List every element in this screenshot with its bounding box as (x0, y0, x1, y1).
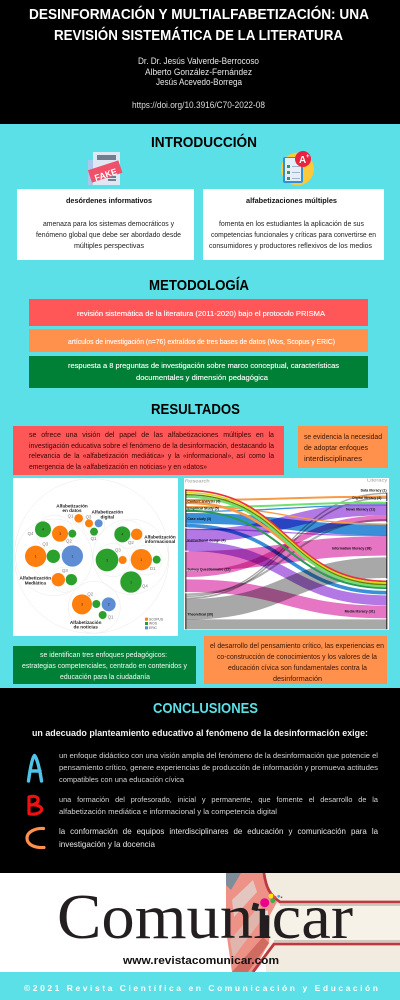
result: pensamiento crítico: el desarrollo del pensamiento crítico, las experiencias en (210, 641, 384, 650)
result: enfoques pedagógicos (13, 646, 196, 684)
conclusion A: pensamiento crítico, genere experiencias de producción de información y promueva actitudes (59, 763, 378, 772)
result: enfoques pedagógicos: estrategias competenciales, centrado en contenidos y (22, 661, 187, 670)
chart: bubble chart of literacies: Q2 (128, 540, 134, 545)
chart: bubble chart of literacies: Q3 (62, 568, 68, 573)
result: enfoques pedagógicos: educación para la ciudadanía (60, 672, 151, 681)
chart: bubble chart of literacies: Q3 (115, 547, 121, 552)
chart: sankey research to literacy: Research (185, 478, 210, 483)
chart: bubble chart of literacies: Alfabetización (70, 620, 102, 625)
panel: conclusiones (0, 688, 400, 873)
result: alfabetizaciones múltiples: se ofrece una visión del papel de las alfabetizaciones múltiples en la (29, 430, 275, 439)
chart: sankey research to literacy: Content analysis (6) (187, 499, 220, 503)
panel: desórdenes informativos: desórdenes informativos (66, 196, 152, 205)
logo: Comunicar: Comunıcar (57, 881, 353, 952)
conclusion C (59, 826, 378, 849)
chart: sankey research to literacy: News literacy (11) (346, 507, 375, 511)
icon: fake news: FAKE (93, 166, 118, 183)
result: pensamiento crítico: desinformación (273, 674, 322, 683)
icon: letter A (28, 756, 42, 781)
chart: bubble chart of literacies: 2 (108, 603, 110, 607)
chart: bubble chart of literacies: 3 (81, 603, 83, 607)
legend (145, 617, 164, 630)
icon: A plus notebook (281, 151, 314, 186)
chart: bubble chart of literacies: 4 (42, 528, 44, 532)
chart: sankey research to literacy: Data literacy (1) (361, 489, 387, 493)
chart: bubble chart of literacies: D1 (150, 566, 156, 571)
title: DESINFORMACIÓN Y MULTIALFABETIZACIÓN: UNA (29, 5, 369, 23)
icon: fake news (88, 152, 122, 185)
footer copyright bar (0, 972, 400, 1000)
chart: bubble chart of literacies: Q4 (142, 584, 148, 589)
conclusion A: compatibles con una educación cívica (59, 775, 185, 784)
legend: WOS (149, 622, 158, 626)
heading: introducción: INTRODUCCIÓN (151, 133, 257, 151)
legend: ERIC (149, 626, 158, 630)
panel: desórdenes informativos: múltiples perspectivas (74, 241, 144, 250)
result: pensamiento crítico: co-construcción de conocimientos y los valores de la (217, 652, 378, 661)
method step: preguntas (29, 356, 368, 388)
method step: artículos: artículos de investigación (n=76) extraídos de tres bases de datos (Wos, Scopus y ERIC) (68, 337, 335, 346)
result: pensamiento crítico: educación cívica son fundamentales contra la (228, 663, 368, 672)
chart: bubble chart of literacies: Alfabetización (92, 510, 123, 515)
header panel (0, 0, 400, 124)
method step: revisión: revisión sistemática de la literatura (2011-2020) bajo el protocolo PRISMA (77, 309, 326, 318)
chart: bubble chart of literacies: informacional (145, 539, 175, 544)
panel: alfabetizaciones múltiples: competencias funcionales y críticas para convertirse en (211, 230, 376, 239)
logo dots (251, 894, 282, 938)
books photo (226, 873, 400, 972)
chart: bubble chart of literacies: Q1 (91, 536, 97, 541)
panel: alfabetizaciones múltiples (203, 189, 384, 260)
result: enfoques interdisciplinares: interdisciplinares (304, 454, 362, 463)
chart: bubble chart of literacies: 3 (59, 532, 61, 536)
conclusion B (59, 795, 379, 816)
icon: A plus notebook: + (306, 154, 310, 160)
method step: preguntas: respuesta a 8 preguntas de investigación sobre marco conceptual, características (68, 361, 339, 370)
panel: alfabetizaciones múltiples: fomenta en los estudiantes la aplicación de sus (219, 219, 364, 228)
chart: sankey research to literacy: Empirical Study (5) (187, 506, 219, 510)
panel: alfabetizaciones múltiples: alfabetizaciones múltiples (246, 196, 337, 205)
chart: bubble chart of literacies: digital (100, 514, 114, 519)
chart: bubble chart of literacies: Alfabetización (56, 504, 88, 509)
chart: sankey research to literacy: Digital literacy (4) (352, 496, 381, 500)
authors (138, 56, 259, 87)
chart: bubble chart of literacies: Mediática (25, 580, 46, 585)
chart: bubble chart of literacies: 1 (35, 555, 37, 559)
heading: resultados: RESULTADOS (151, 401, 240, 418)
result: enfoques pedagógicos: se identifican tres enfoques pedagógicos: (40, 650, 167, 659)
chart: bubble chart of literacies: Q1 (108, 615, 114, 620)
chart: bubble chart of literacies: 1 (140, 558, 142, 562)
chart: sankey research to literacy: Theoretical (30) (187, 612, 213, 616)
icon: letter B (29, 796, 42, 814)
chart: sankey research to literacy: Literacy (367, 478, 388, 483)
conclusion B: una formación del profesorado, inicial y permanente, que fomente el desarrollo de la (59, 795, 379, 804)
chart: bubble chart of literacies: Q2 (66, 539, 72, 544)
chart: bubble chart of literacies: 1 (71, 554, 73, 558)
result: alfabetizaciones múltiples: emergencia de la «alfabetización en noticias» y en «datos» (29, 462, 207, 471)
chart: bubble chart of literacies: 4 (121, 533, 123, 537)
chart: sankey research to literacy: Instructional design (4) (187, 539, 226, 543)
title (29, 5, 369, 44)
chart: bubble chart of literacies: Q3 (42, 541, 49, 546)
heading: conclusiones: CONCLUSIONES (153, 700, 258, 717)
conclusion C: investigación y la docencia (59, 839, 155, 849)
title: REVISIÓN SISTEMÁTICA DE LA LITERATURA (54, 26, 343, 44)
authors: Jesús Acevedo-Borrega (156, 77, 242, 87)
chart: sankey research to literacy: Case study (3) (187, 517, 211, 521)
chart: bubble chart of literacies: Q3 (86, 515, 92, 520)
result: alfabetizaciones múltiples (13, 426, 284, 475)
icon: A plus notebook: A (299, 155, 306, 166)
chart: bubble chart of literacies: de noticias (74, 625, 98, 630)
panel: desórdenes informativos (17, 189, 194, 260)
method step: preguntas: documentales y dimensión pedagógica (136, 373, 269, 382)
chart: bubble chart of literacies: 3 (106, 558, 108, 562)
result: alfabetizaciones múltiples: investigación educativa sobre el fenómeno de la desinformación, destacando la (29, 441, 275, 450)
chart: bubble chart of literacies: en datos (62, 508, 82, 513)
conclusion B: alfabetización mediática e informacional y la competencia digital (59, 807, 277, 816)
conclusion C: la conformación de equipos interdisciplinares de educación y comunicación para la (59, 826, 378, 836)
result: enfoques interdisciplinares: de adoptar enfoques (304, 443, 368, 452)
authors: Alberto González-Fernández (145, 67, 252, 77)
conclusions intro: un adecuado planteamiento educativo al fenómeno de la desinformación exige: (32, 728, 368, 739)
heading: metodología: METODOLOGÍA (149, 277, 249, 294)
result: enfoques interdisciplinares (298, 426, 388, 468)
result: enfoques interdisciplinares: se evidencia la necesidad (304, 432, 382, 441)
icon: letter C (27, 828, 44, 848)
chart: bubble chart of literacies: Q4 (28, 531, 34, 536)
chart: bubble chart of literacies: Alfabetización (20, 576, 51, 581)
chart: sankey research to literacy (184, 478, 389, 630)
conclusion A: un enfoque didáctico con una visión amplia del fenómeno de la desinformación que potencie el (59, 751, 378, 760)
footer logo panel (0, 873, 400, 972)
panel: desórdenes informativos: fenómeno global que debe ser abordado desde (36, 230, 181, 239)
method step: artículos (29, 329, 368, 352)
authors: Dr. Dr. Jesús Valverde-Berrocoso (138, 56, 259, 66)
doi link: https://doi.org/10.3916/C70-2022-08 (132, 100, 265, 110)
chart: sankey research to literacy: Information literacy (38) (332, 546, 371, 550)
footer copyright bar: ©2021 Revista Científica en Comunicación y Educación (24, 983, 378, 993)
chart: sankey research to literacy: Media literacy (31) (345, 609, 375, 613)
chart: sankey research to literacy: Survey Questionnaire (22) (187, 568, 231, 572)
chart: bubble chart of literacies: Q2 (87, 592, 94, 597)
page background cyan (0, 124, 400, 688)
panel: alfabetizaciones múltiples: consumidores y productores reflexivos de los medios (209, 241, 372, 250)
conclusion A (59, 751, 378, 784)
chart: bubble chart of literacies: Alfabetización (144, 534, 176, 539)
method step: revisión (29, 299, 368, 326)
chart: bubble chart of literacies (13, 478, 178, 636)
website: www.revistacomunicar.com (122, 955, 279, 967)
legend: SCOPUS (149, 617, 164, 621)
chart: bubble chart of literacies: 1 (130, 580, 132, 584)
chart: bubble chart of literacies: Q1 (68, 513, 74, 518)
result: alfabetizaciones múltiples: relevancia de la «alfabetización mediática» y la «informacional», así como la (29, 451, 275, 460)
result: pensamiento crítico (204, 636, 387, 684)
panel: desórdenes informativos: amenaza para los sistemas democráticos y (43, 219, 174, 228)
